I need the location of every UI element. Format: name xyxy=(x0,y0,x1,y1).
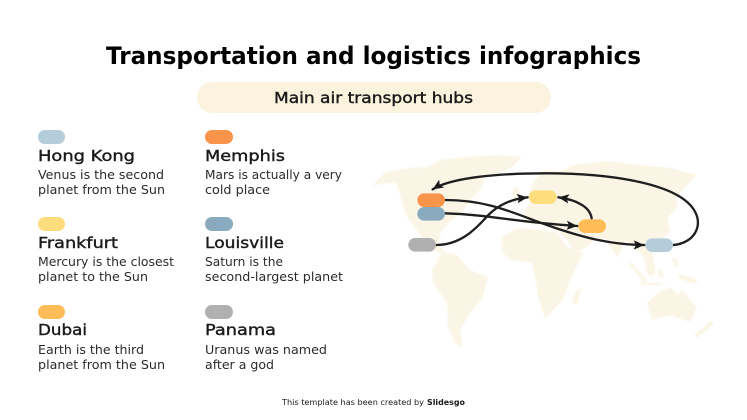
legend item: Hong Kong: Hong Kong xyxy=(38,147,135,165)
footer credit: Slidesgo xyxy=(427,398,465,407)
arrows: routes xyxy=(433,173,698,245)
legend item: Hong Kong: Venus is the second xyxy=(38,168,164,182)
legend item: Louisville: Saturn is the xyxy=(205,255,283,269)
legend item: Dubai: Earth is the third xyxy=(38,343,144,357)
legend item: Memphis xyxy=(205,130,342,197)
legend item: Hong Kong xyxy=(38,130,165,197)
arrow: Panama to Frankfurt xyxy=(436,197,528,245)
legend item: Hong Kong: planet from the Sun xyxy=(38,183,165,197)
legend item: Memphis: cold place xyxy=(205,183,270,197)
legend item: Dubai: planet from the Sun xyxy=(38,358,165,372)
arrow: Dubai to Frankfurt xyxy=(558,197,592,218)
map marker: Memphis xyxy=(417,193,445,207)
legend item: Frankfurt: Frankfurt xyxy=(38,234,118,252)
legend item: Panama: Uranus was named xyxy=(205,343,327,357)
legend item: Panama xyxy=(205,305,327,372)
subtitle banner: Main air transport hubs xyxy=(274,89,473,107)
map markers: hubs xyxy=(408,190,673,252)
map marker: Panama xyxy=(408,238,436,252)
arrow: Louisville to Dubai xyxy=(445,213,577,226)
subtitle banner xyxy=(197,82,551,113)
title: Transportation and logistics infographics xyxy=(106,42,641,70)
legend item: Louisville: second-largest planet xyxy=(205,270,343,284)
arrow: Hong Kong to Memphis xyxy=(433,173,698,245)
map marker: Frankfurt xyxy=(529,190,557,204)
panel: hub legend xyxy=(38,130,343,372)
legend item: Frankfurt: planet to the Sun xyxy=(38,270,148,284)
footer credit: This template has been created by xyxy=(281,398,424,407)
legend item: Dubai xyxy=(38,305,165,372)
legend item: Louisville: Louisville xyxy=(205,234,284,252)
legend item: Memphis: Memphis xyxy=(205,147,285,165)
map: continents xyxy=(372,155,714,347)
legend item: Louisville xyxy=(205,217,343,284)
map marker: Hong Kong xyxy=(645,238,673,252)
legend item: Panama: Panama xyxy=(205,321,276,339)
map marker: Dubai xyxy=(578,219,606,233)
arrow: Memphis to Hong Kong xyxy=(445,200,644,245)
legend item: Frankfurt: Mercury is the closest xyxy=(38,255,174,269)
legend item: Memphis: Mars is actually a very xyxy=(205,168,342,182)
world map with routes xyxy=(372,155,714,347)
legend item: Panama: after a god xyxy=(205,358,274,372)
legend item: Dubai: Dubai xyxy=(38,321,87,339)
legend item: Frankfurt xyxy=(38,217,174,284)
map marker: Louisville xyxy=(417,207,445,221)
